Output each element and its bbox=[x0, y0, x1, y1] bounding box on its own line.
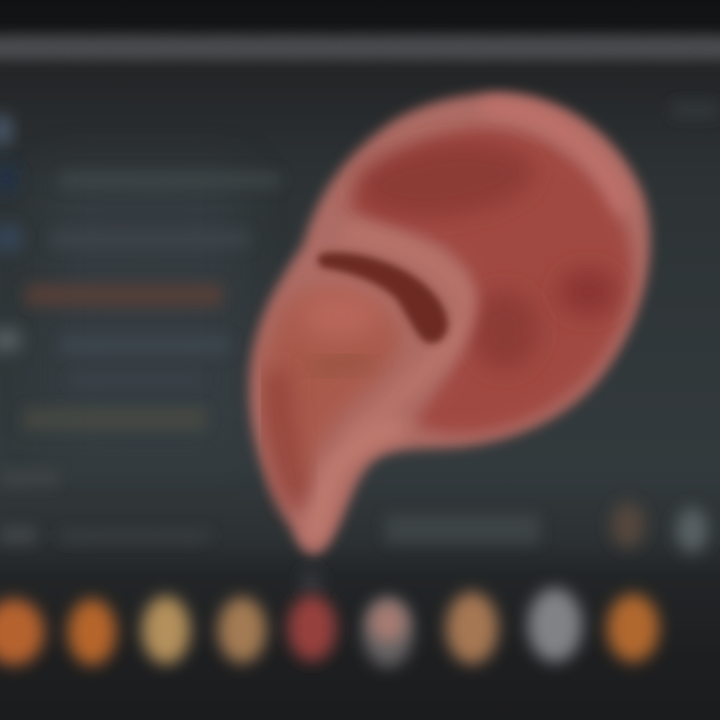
dark fold bbox=[317, 252, 448, 343]
neck highlight bbox=[314, 428, 395, 532]
icon: silver circle 8 bbox=[528, 588, 582, 662]
icon: small stem above red circle bbox=[300, 569, 322, 595]
darker shading upper bbox=[352, 135, 538, 225]
dark spot centre bbox=[471, 290, 539, 370]
text block: bottom line bbox=[0, 526, 210, 544]
panel: right side text bbox=[385, 102, 719, 553]
icon: orange circle 2 bbox=[68, 599, 116, 665]
text block: line four: Risk factors bbox=[70, 372, 200, 388]
text block: bottom line: Digestive health tips bbox=[60, 530, 210, 544]
icon: tan circle 7 bbox=[446, 592, 498, 664]
left dark edge bbox=[277, 370, 302, 505]
icon: tan circle 4 bbox=[218, 597, 266, 663]
lobe bright patch bbox=[300, 291, 380, 339]
light band around fold bbox=[345, 232, 466, 438]
row of food circles bbox=[0, 569, 659, 667]
text block: line three: Causes and symptoms bbox=[60, 338, 230, 355]
haze behind text panel bbox=[50, 170, 240, 450]
text block: yellow heading: Diet and prevention bbox=[24, 409, 206, 429]
text block: lower line bbox=[0, 470, 60, 486]
icon: orange circle 9 bbox=[607, 594, 659, 662]
icon: top blue marker bbox=[0, 114, 12, 146]
text block: lower centre caption: Stomach anatomy bbox=[385, 522, 540, 539]
text block: lower centre caption bbox=[385, 514, 540, 544]
lobe inner crease bbox=[318, 360, 365, 372]
text block: red heading: Ulcers and gastritis bbox=[28, 286, 220, 307]
dark spot right bbox=[558, 268, 618, 316]
text block: line four bbox=[70, 372, 200, 388]
icon: second blue marker bbox=[0, 162, 20, 194]
text block: line one: Gastric lining protects the wall bbox=[60, 173, 280, 190]
text block: line two: Acid and enzyme secretion bbox=[50, 232, 250, 249]
rim highlight top right bbox=[490, 108, 622, 205]
stomach inner red chamber bbox=[348, 128, 632, 434]
icon: brown small mark bbox=[611, 502, 645, 548]
stomach outer body bbox=[250, 93, 650, 555]
lower lobe warm area bbox=[264, 291, 401, 490]
icon: gray small mark bbox=[676, 507, 708, 553]
icon: red circle 5 bbox=[288, 595, 336, 661]
panel: left text list bbox=[0, 114, 280, 544]
icon: gray marker bbox=[0, 327, 22, 353]
icon: orange circle 1 bbox=[0, 599, 44, 665]
text block: top right label: Labels bbox=[672, 103, 719, 118]
illustration: stomach bbox=[250, 93, 650, 555]
text block: lower line: Notes bbox=[0, 470, 60, 486]
icon: tan circle 3 bbox=[142, 596, 190, 664]
icon: third blue marker bbox=[0, 223, 23, 253]
icon: pink gray circle 6 bbox=[363, 597, 413, 667]
